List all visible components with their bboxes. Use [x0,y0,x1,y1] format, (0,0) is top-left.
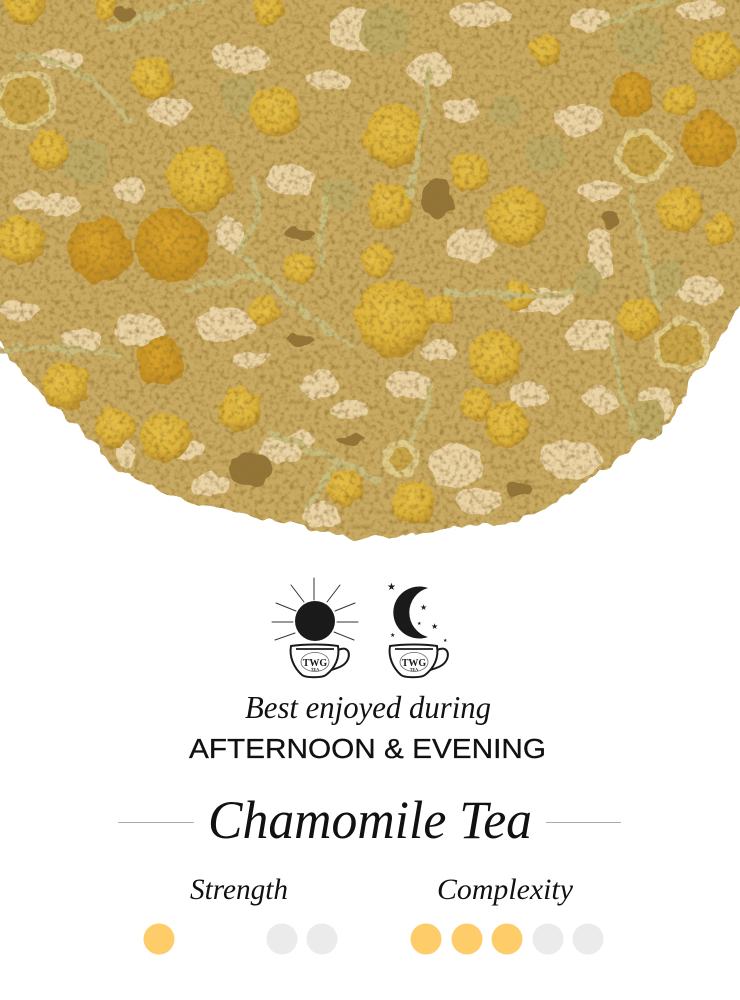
yellow flower heads [0,0,740,525]
stars: ★ [443,638,448,644]
dark gaps [113,8,619,498]
sun rays [272,578,358,640]
icon: sun over cup [272,578,358,677]
olive flower backs [61,4,685,440]
stars: ★ [417,621,422,627]
complexity label: Complexity [437,873,574,906]
base of leaf pile [0,0,740,540]
teacup: TEA [410,667,418,672]
sun disc [295,601,335,641]
stars: ★ [390,632,395,639]
strength label: Strength [190,873,288,906]
panel: complexity rating [410,873,604,954]
tea leaves: dried chamomile pile [0,0,740,540]
title: chamomile tea: Chamomile Tea [208,790,532,850]
teacup: TWG [402,658,426,669]
teacup [291,644,349,677]
stars: ★ [420,603,427,612]
complexity dots [410,924,604,954]
panel: strength rating [144,873,338,954]
teacup [390,644,448,677]
stars [387,582,448,644]
strength dots [144,924,338,954]
teacup: TEA [311,667,319,672]
icon: moon and stars over cup [387,582,448,677]
text: best enjoyed during: Best enjoyed during [245,689,491,725]
ringed flower heads [0,72,707,473]
teacup: TWG [303,658,327,669]
stems [0,0,670,505]
stars: ★ [387,582,396,593]
stars: ★ [431,622,438,631]
text: afternoon and evening: AFTERNOON & EVENING [189,733,546,764]
amber flower heads [68,73,738,386]
crescent moon [393,586,428,638]
pale petals [2,0,724,527]
